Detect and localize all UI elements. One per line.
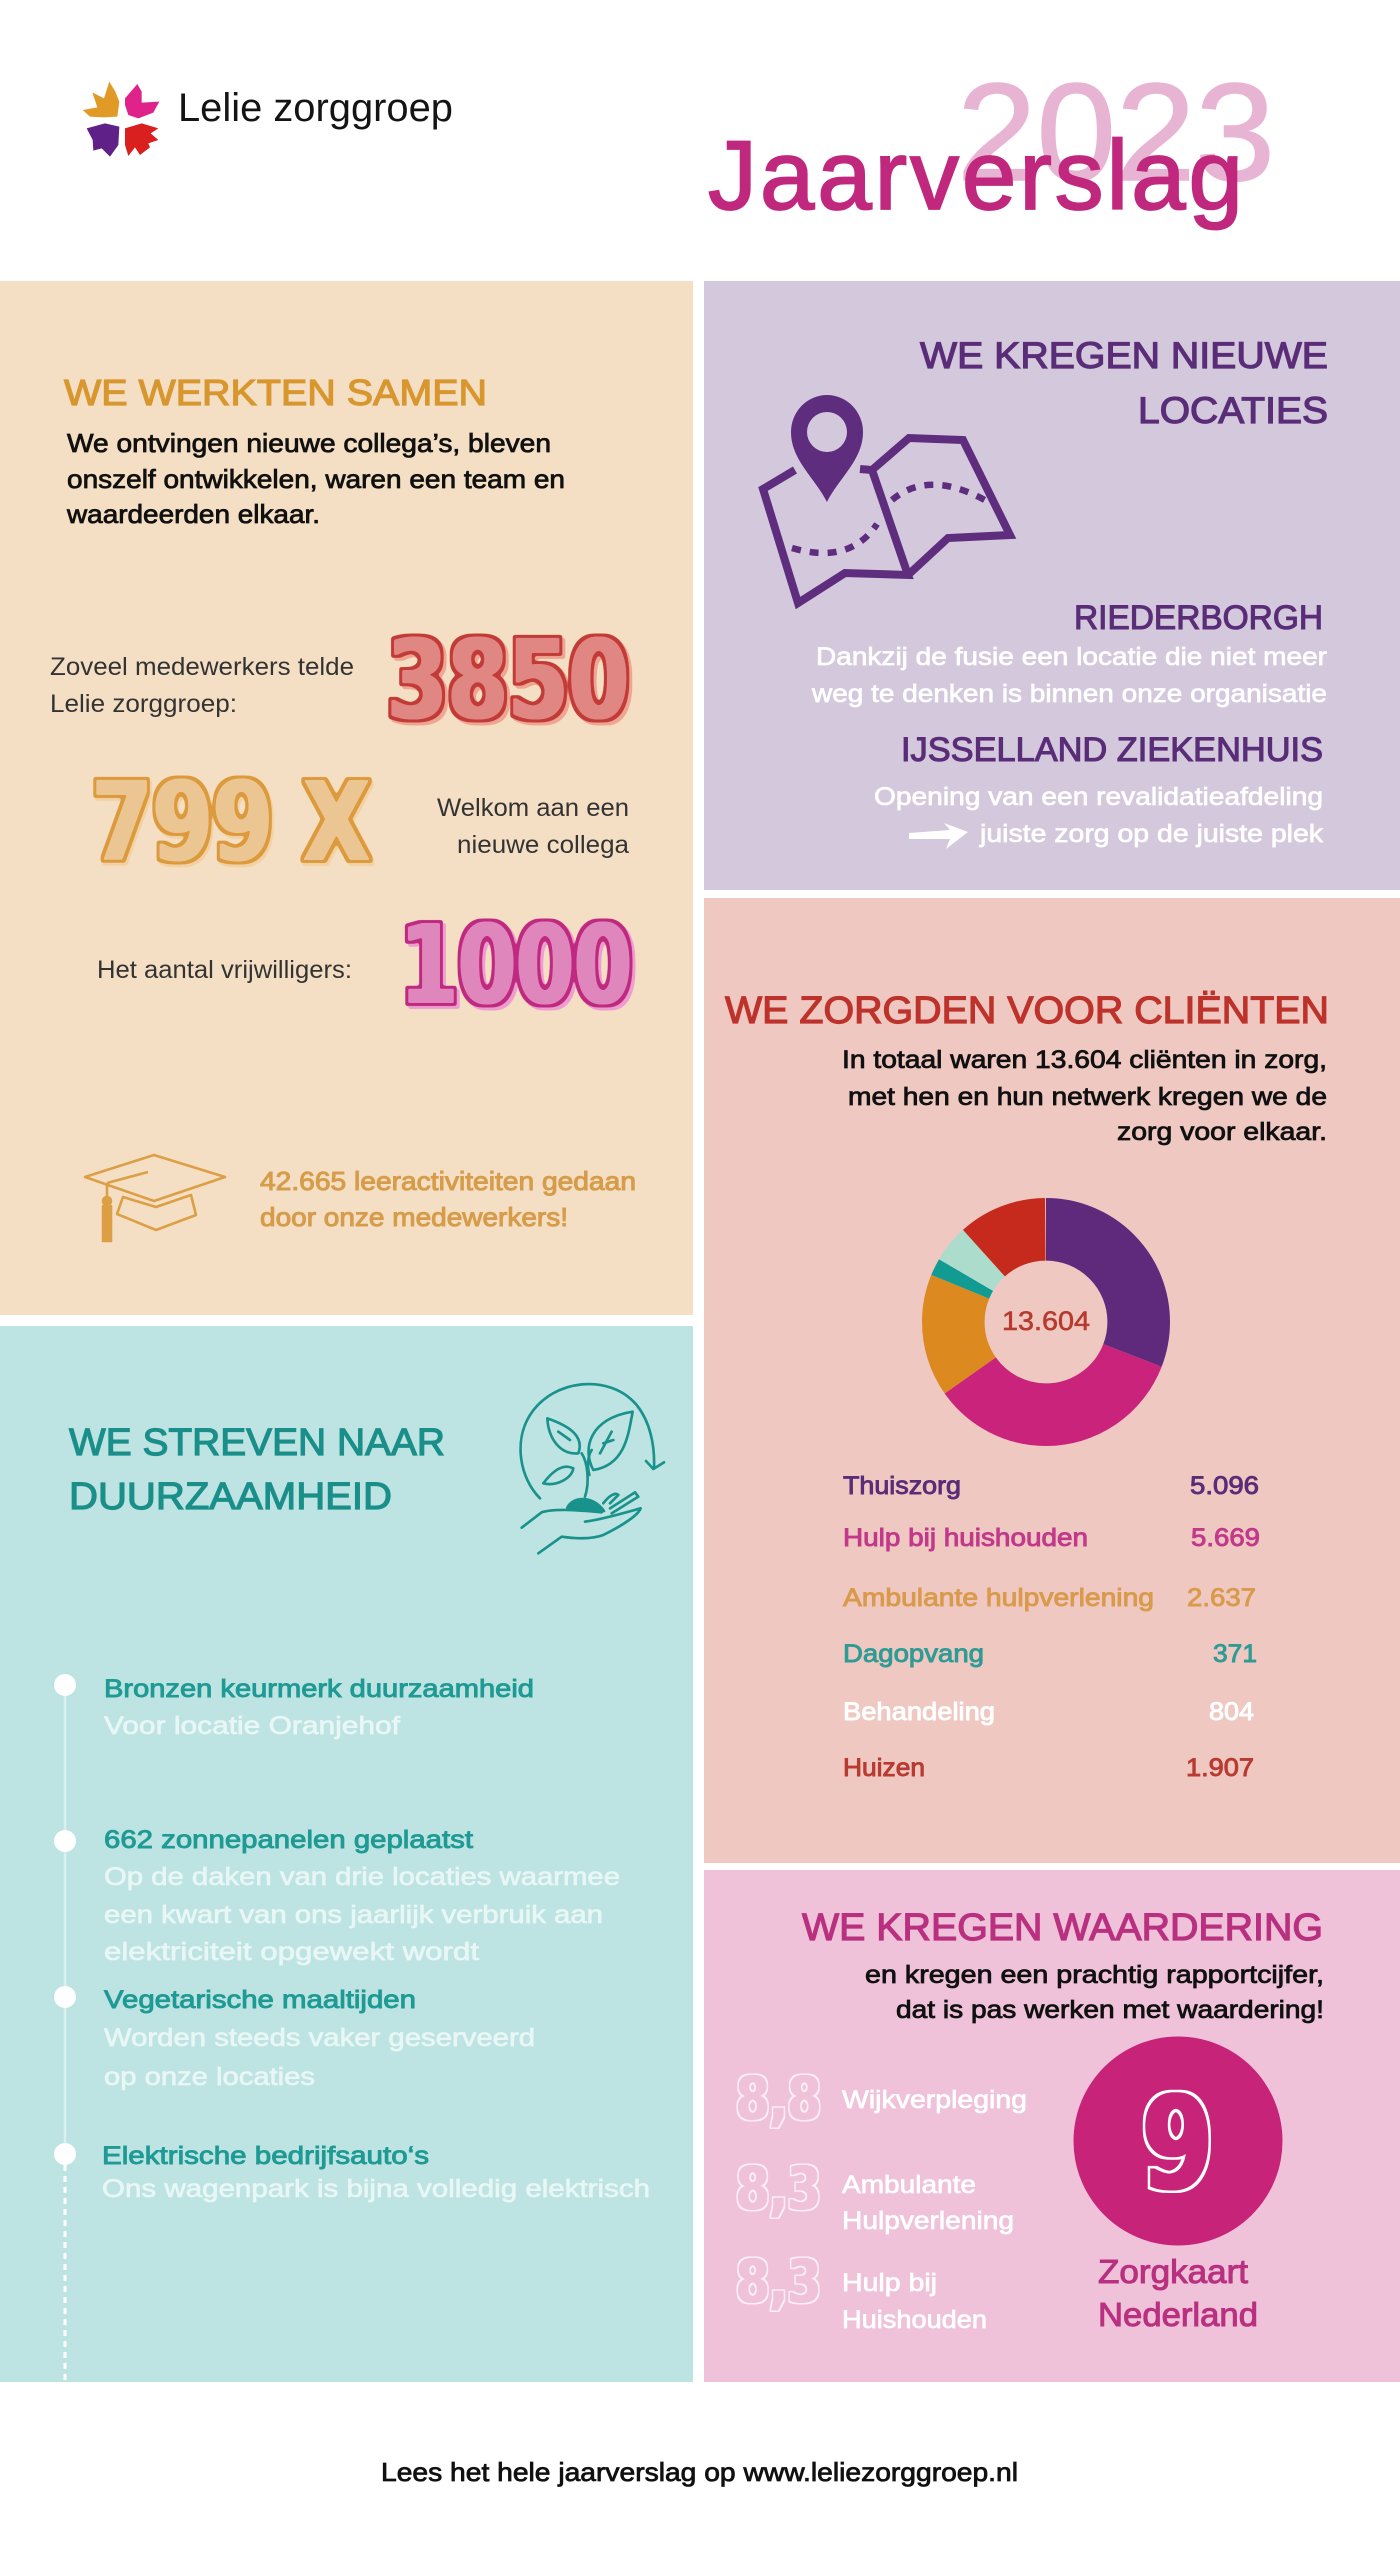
score: 8,3 Ambulante Hulpverlening: Hulpverlening	[842, 2207, 1014, 2235]
donut chart	[953, 1229, 1139, 1415]
legend row: Thuiszorg: Thuiszorg	[843, 1472, 961, 1500]
item: elektrische bedrijfsauto's	[102, 2142, 650, 2203]
text: IJsselland: Opening van een revalidatieafdeling	[874, 783, 1323, 811]
heading: WE KREGEN WAARDERING	[802, 1907, 1323, 1949]
stat label: medewerkers	[50, 653, 354, 718]
item: elektrische bedrijfsauto's: Ons wagenpark is bijna volledig elektrisch	[102, 2175, 650, 2203]
heading	[920, 335, 1328, 431]
heading: WE KREGEN NIEUWE	[920, 335, 1328, 376]
text: IJsselland: juiste zorg op de juiste plek	[979, 820, 1324, 848]
stat number: 799 X: 799 X	[92, 758, 370, 886]
panel: we zorgden voor clienten	[704, 898, 1400, 1863]
year 2023: 2023	[957, 55, 1275, 210]
intro text: zorg voor elkaar.	[1117, 1118, 1327, 1146]
panel: we kregen waardering	[704, 1870, 1400, 2382]
heading: LOCATIES	[1138, 390, 1328, 431]
legend row: Huizen: 1.907	[1186, 1754, 1254, 1782]
score: 8,3 Hulp bij Huishouden: 8,3	[736, 2247, 821, 2317]
legend row: Huizen	[843, 1754, 1254, 1782]
item: zonnepanelen	[104, 1826, 620, 1966]
footer text: Lees het hele jaarverslag op www.leliezorggroep.nl	[381, 2457, 1018, 2487]
arrow	[909, 823, 968, 849]
intro text: We ontvingen nieuwe collega’s, bleven	[67, 428, 551, 458]
score: 8,3 Hulp bij Huishouden	[736, 2247, 987, 2334]
score: 8,3 Ambulante Hulpverlening: Ambulante	[842, 2171, 976, 2199]
heading: WE WERKTEN SAMEN	[64, 372, 487, 413]
item: zonnepanelen: elektriciteit opgewekt wordt	[104, 1938, 479, 1966]
item: vegetarische maaltijden: op onze locaties	[104, 2063, 315, 2091]
label: Zorgkaart Nederland: Zorgkaart	[1098, 2253, 1248, 2290]
heading	[69, 1422, 445, 1518]
intro text: dat is pas werken met waardering!	[896, 1996, 1324, 2024]
item: bronzen keurmerk: Bronzen keurmerk duurzaamheid	[104, 1675, 534, 1703]
score circle: 9: 9	[1142, 2070, 1213, 2219]
intro text: onszelf ontwikkelen, waren een team en	[67, 464, 565, 494]
legend row: Ambulante hulpverlening: 2.637	[1187, 1584, 1256, 1612]
legend row: Dagopvang: Dagopvang	[843, 1640, 984, 1668]
legend row: Thuiszorg: 5.096	[1190, 1472, 1259, 1500]
icon: flower logo	[83, 82, 159, 157]
legend row: Behandeling: 804	[1209, 1698, 1254, 1726]
score: 8,8 Wijkverpleging: 8,8	[736, 2064, 821, 2134]
panel: we kregen nieuwe locaties	[704, 281, 1400, 890]
panel: we werkten samen	[0, 281, 693, 1315]
intro text	[865, 1961, 1324, 2024]
item: vegetarische maaltijden	[104, 1986, 535, 2091]
stat label: vrijwilligers: Het aantal vrijwilligers:	[97, 956, 352, 984]
label: Zorgkaart Nederland	[1098, 2253, 1258, 2333]
item: vegetarische maaltijden: Vegetarische maaltijden	[104, 1986, 416, 2014]
legend row: Hulp bij huishouden: 5.669	[1191, 1524, 1260, 1552]
legend row: Behandeling	[843, 1698, 1254, 1726]
legend row: Huizen: Huizen	[843, 1754, 925, 1782]
panel: we streven naar duurzaamheid	[0, 1326, 693, 2382]
legend row: Behandeling: Behandeling	[843, 1698, 995, 1726]
item: zonnepanelen: een kwart van ons jaarlijk verbruik aan	[104, 1901, 603, 1929]
item: zonnepanelen: Op de daken van drie locaties waarmee	[104, 1863, 620, 1891]
intro text: met hen en hun netwerk kregen we de	[848, 1083, 1327, 1111]
score: 8,3 Hulp bij Huishouden: Hulp bij	[842, 2269, 937, 2297]
intro text: en kregen een prachtig rapportcijfer,	[865, 1961, 1324, 1989]
text: Riederborgh: Dankzij de fusie een locatie die niet meer	[816, 643, 1327, 671]
legend row: Ambulante hulpverlening	[843, 1584, 1256, 1612]
logo wordmark: Lelie zorggroep	[178, 86, 453, 130]
legend row: Dagopvang	[843, 1640, 1257, 1668]
callout: leeractiviteiten	[260, 1166, 636, 1232]
text: Riederborgh	[811, 643, 1327, 708]
icon: graduation cap	[85, 1155, 225, 1241]
stat label: nieuwe collega: nieuwe collega	[457, 831, 629, 859]
stat label: medewerkers: Zoveel medewerkers telde	[50, 653, 354, 681]
label: Zorgkaart Nederland: Nederland	[1098, 2296, 1258, 2333]
intro text: waardeerden elkaar.	[66, 499, 320, 529]
item: vegetarische maaltijden: Worden steeds vaker geserveerd	[104, 2024, 535, 2052]
subheading: IJsselland Ziekenhuis: IJSSELLAND ZIEKENHUIS	[901, 731, 1323, 769]
donut total: 13.604	[1002, 1306, 1090, 1336]
score: 8,3 Ambulante Hulpverlening	[736, 2154, 1014, 2235]
item: elektrische bedrijfsauto's: Elektrische bedrijfsauto‘s	[102, 2142, 429, 2170]
callout: leeractiviteiten: 42.665 leeractiviteiten gedaan	[260, 1166, 636, 1196]
legend row: Dagopvang: 371	[1213, 1640, 1257, 1668]
icon: map with pin	[763, 395, 1010, 603]
legend	[843, 1472, 1260, 1782]
intro text	[842, 1046, 1327, 1146]
stat number: 1000: 1000	[400, 901, 632, 1029]
legend row: Hulp bij huishouden: Hulp bij huishouden	[843, 1524, 1088, 1552]
legend row: Ambulante hulpverlening: Ambulante hulpverlening	[843, 1584, 1154, 1612]
item: zonnepanelen: 662 zonnepanelen geplaatst	[104, 1826, 473, 1854]
callout: leeractiviteiten: door onze medewerkers!	[260, 1202, 568, 1232]
legend row: Hulp bij huishouden	[843, 1524, 1260, 1552]
score circle: 9	[1074, 2036, 1282, 2246]
intro text	[66, 428, 565, 529]
stat label: medewerkers: Lelie zorggroep:	[50, 690, 237, 718]
item: bronzen keurmerk: Voor locatie Oranjehof	[104, 1712, 400, 1740]
intro text: In totaal waren 13.604 cliënten in zorg,	[842, 1046, 1327, 1074]
score: 8,8 Wijkverpleging	[736, 2064, 1027, 2134]
heading: WE ZORGDEN VOOR CLIËNTEN	[725, 990, 1329, 1032]
subheading: Riederborgh: RIEDERBORGH	[1074, 599, 1323, 637]
heading: WE STREVEN NAAR	[69, 1422, 445, 1464]
heading Jaarverslag: Jaarverslag	[708, 120, 1243, 230]
logo: Lelie zorggroep	[83, 82, 453, 157]
stat number: 3850: 3850	[387, 616, 629, 744]
text: IJsselland	[874, 783, 1324, 848]
item: bronzen keurmerk	[104, 1675, 534, 1740]
score: 8,8 Wijkverpleging: Wijkverpleging	[842, 2086, 1027, 2114]
score: 8,3 Ambulante Hulpverlening: 8,3	[736, 2154, 821, 2224]
legend row: Thuiszorg	[843, 1472, 1259, 1500]
timeline	[54, 1674, 76, 2382]
icon: plant in hand	[521, 1384, 664, 1553]
score: 8,3 Hulp bij Huishouden: Huishouden	[842, 2306, 987, 2334]
heading: DUURZAAMHEID	[69, 1476, 392, 1518]
title	[708, 55, 1275, 230]
text: Riederborgh: weg te denken is binnen onze organisatie	[811, 680, 1327, 708]
stat label: nieuwe collega	[437, 794, 629, 859]
stat label: nieuwe collega: Welkom aan een	[437, 794, 629, 822]
